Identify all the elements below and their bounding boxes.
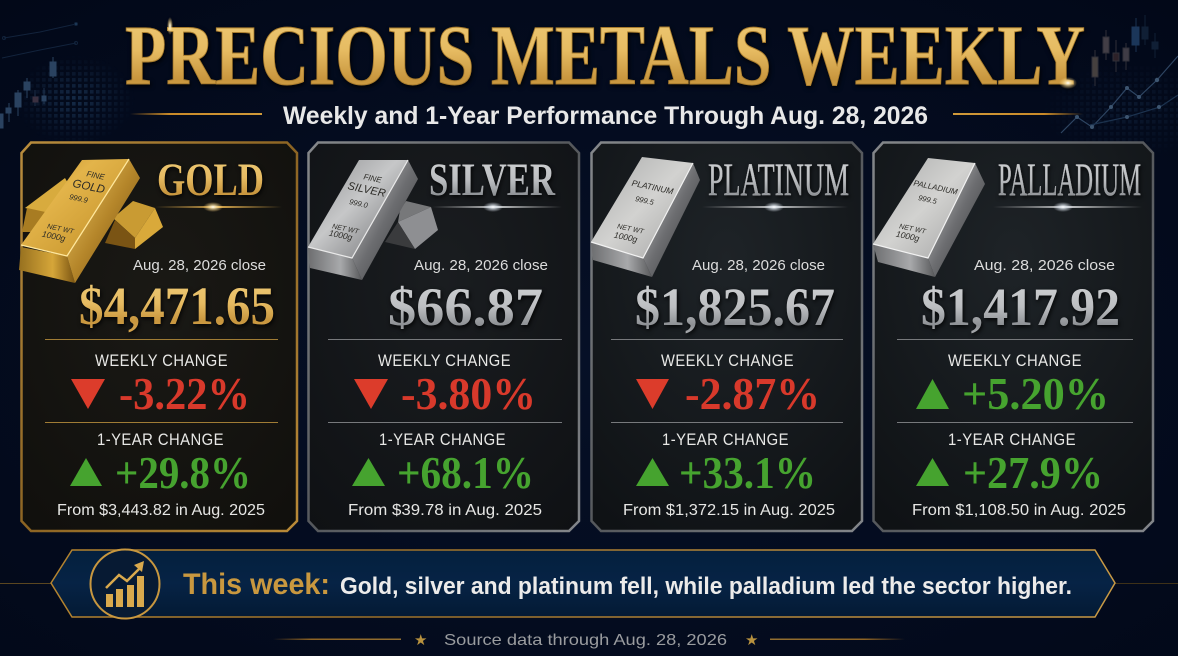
subtitle: Weekly and 1-Year Performance Through Aug. 28, 2026 — [283, 102, 928, 130]
weekly change: -2.87% — [685, 368, 820, 419]
weekly change: -3.80% — [401, 368, 536, 419]
weekly change: +5.20% — [962, 368, 1109, 419]
1-year change — [352, 447, 534, 498]
callout text: Gold, silver and platinum fell, while palladium led the sector higher. — [340, 573, 1072, 600]
icon: palladium bar: PALLADIUM — [913, 178, 959, 197]
divider: silver sparkle — [432, 202, 562, 212]
close date: Aug. 28, 2026 close — [414, 257, 548, 274]
icon: platinum bar: PLATINUM — [631, 178, 675, 197]
1-year change: +29.8% — [115, 447, 251, 498]
1-year label: 1-YEAR CHANGE — [948, 431, 1076, 449]
divider: gold sparkle — [155, 202, 282, 212]
prior price: From $1,372.15 in Aug. 2025 — [623, 502, 835, 519]
icon: gold bars: FINE — [86, 169, 106, 182]
prior price: From $1,108.50 in Aug. 2025 — [912, 502, 1126, 519]
icon: growth chart — [90, 550, 160, 618]
1-year change: +33.1% — [679, 447, 816, 498]
weekly label: WEEKLY CHANGE — [95, 352, 228, 370]
prior price: From $39.78 in Aug. 2025 — [348, 502, 542, 519]
icon: silver bars: SILVER — [347, 180, 387, 200]
prior price: From $3,443.82 in Aug. 2025 — [57, 502, 265, 519]
price: $66.87 — [388, 277, 543, 337]
1-year change — [636, 447, 816, 498]
weekly label: WEEKLY CHANGE — [661, 352, 794, 370]
icon: palladium bar: 999.5 — [917, 193, 938, 206]
1-year label: 1-YEAR CHANGE — [97, 431, 224, 449]
icon: platinum bar: NET WT — [616, 223, 645, 236]
icon: gold bars: GOLD — [71, 178, 106, 196]
icon: gold bars: 1000g — [41, 229, 66, 243]
divider: palladium sparkle — [993, 202, 1142, 212]
close date: Aug. 28, 2026 close — [133, 257, 266, 274]
icon: silver bars — [308, 160, 438, 280]
price: $1,825.67 — [635, 277, 835, 337]
source note: ★ — [745, 632, 758, 649]
icon: platinum bar: 1000g — [613, 230, 638, 244]
callout banner — [0, 550, 1178, 618]
icon: silver bars: 1000g — [328, 228, 353, 242]
heading: gold: GOLD — [157, 154, 264, 206]
icon: silver bars: FINE — [363, 172, 383, 185]
1-year change: +68.1% — [397, 447, 534, 498]
panel: platinum — [591, 142, 862, 531]
icon: palladium bar — [873, 158, 985, 277]
panel: palladium — [873, 142, 1153, 531]
icon: gold bars — [19, 159, 163, 283]
source note: ★ — [414, 632, 427, 649]
divider: platinum sparkle — [702, 202, 848, 212]
weekly label: WEEKLY CHANGE — [378, 352, 511, 370]
price: $4,471.65 — [79, 276, 275, 336]
icon: platinum bar: 999.5 — [634, 194, 655, 207]
icon: silver bars: 999.0 — [348, 197, 369, 210]
icon: platinum bar — [591, 157, 700, 277]
icon: silver bars: NET WT — [331, 223, 360, 236]
icon: gold bars: 999.9 — [68, 192, 89, 205]
1-year change — [70, 447, 251, 498]
source note: Source data through Aug. 28, 2026 — [444, 632, 727, 649]
weekly label: WEEKLY CHANGE — [948, 352, 1082, 370]
panel: gold — [19, 142, 297, 531]
weekly change: -3.22% — [119, 368, 250, 419]
icon: palladium bar: 1000g — [895, 229, 920, 243]
1-year label: 1-YEAR CHANGE — [662, 431, 789, 449]
icon: palladium bar: NET WT — [898, 223, 927, 236]
close date: Aug. 28, 2026 close — [974, 257, 1115, 274]
icon: gold bars: NET WT — [46, 223, 75, 236]
heading: silver: SILVER — [429, 154, 556, 206]
1-year label: 1-YEAR CHANGE — [379, 431, 506, 449]
panel: silver — [308, 142, 579, 531]
1-year change: +27.9% — [963, 447, 1103, 498]
price: $1,417.92 — [921, 277, 1120, 337]
callout lead: This week: — [183, 568, 330, 601]
heading: platinum: PLATINUM — [708, 154, 849, 206]
source note — [273, 632, 905, 649]
close date: Aug. 28, 2026 close — [692, 257, 825, 274]
weekly change — [71, 368, 250, 419]
